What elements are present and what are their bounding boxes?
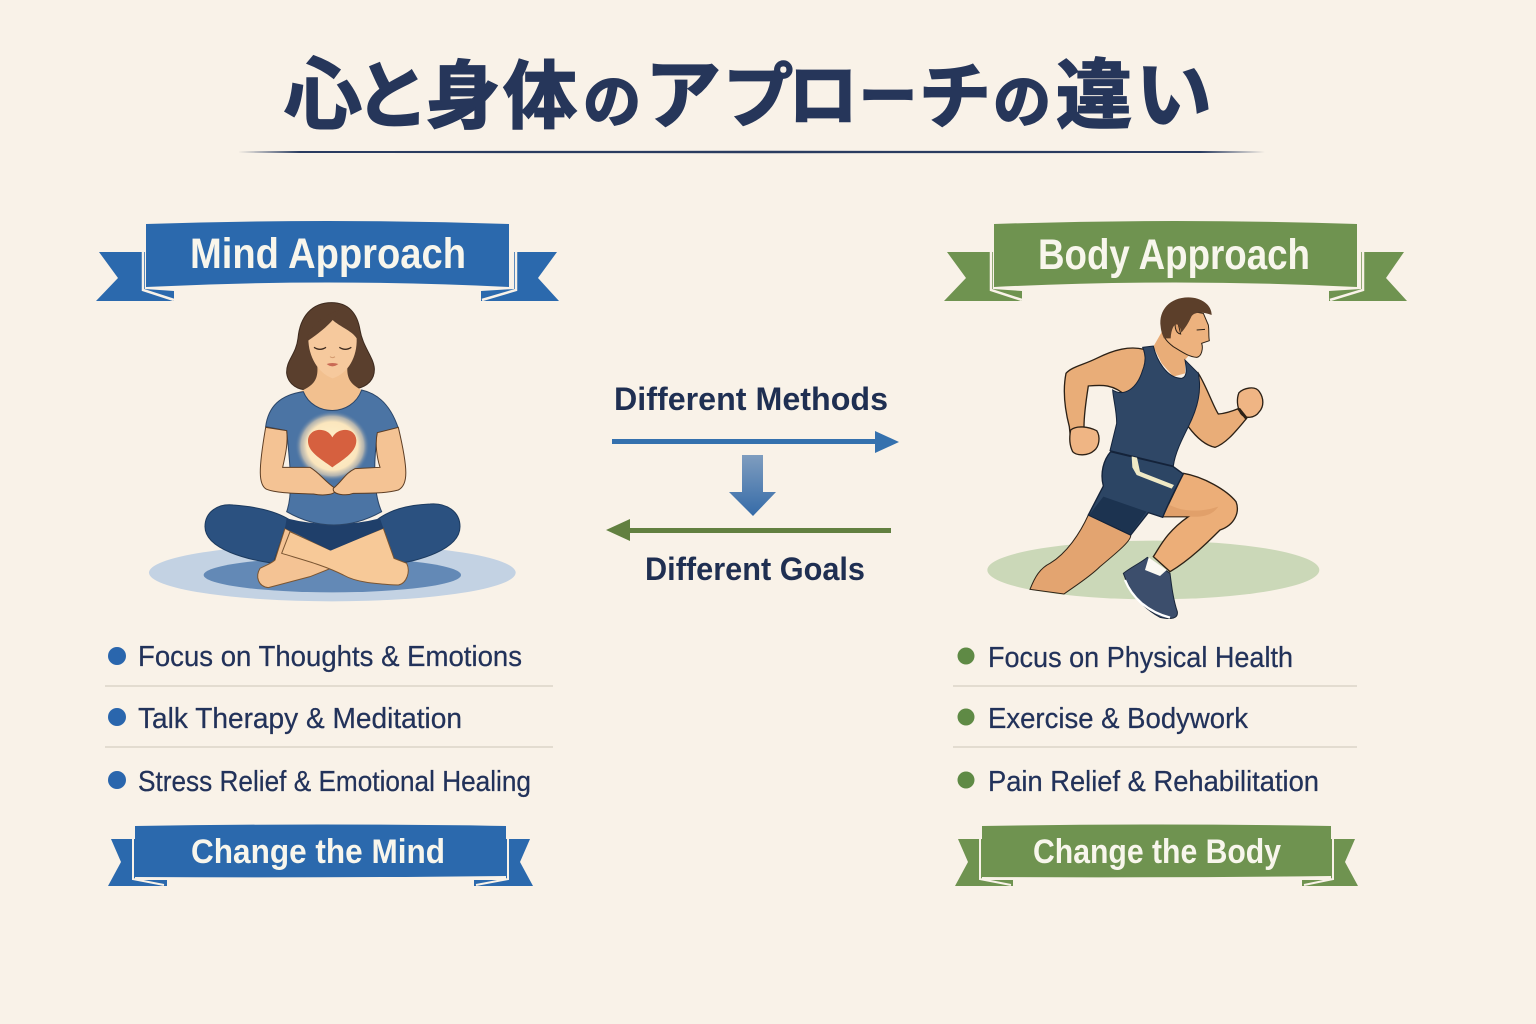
label: Different Methods: Different Methods (614, 381, 888, 417)
bullet list: mind (105, 641, 553, 798)
wrist band (1239, 409, 1247, 419)
shorts (1088, 452, 1183, 535)
title: ロ (788, 40, 858, 141)
rear fist (1070, 427, 1099, 455)
head (1163, 312, 1209, 357)
sock (1145, 557, 1167, 576)
title: 体 (503, 37, 577, 144)
arrow: right blue (612, 431, 899, 453)
hair (287, 303, 374, 390)
hair front (307, 309, 340, 342)
rear arm (1064, 348, 1147, 440)
front fist (1237, 388, 1263, 417)
shorts stripe (1132, 456, 1174, 489)
shirt (266, 390, 398, 525)
bullet list: mind: Focus on Thoughts & Emotions (138, 641, 522, 673)
ear and eye (1175, 320, 1205, 334)
illustration: meditating woman (149, 303, 516, 601)
glow (295, 411, 370, 481)
title: 心 (284, 33, 362, 145)
ribbon: Change the Body: Change the Body (1033, 833, 1281, 871)
legs (205, 505, 290, 563)
title: の (583, 55, 641, 139)
neck (1153, 323, 1193, 377)
bullet list: body: Pain Relief & Rehabilitation (988, 766, 1319, 798)
front leg (1153, 473, 1237, 572)
bullet list: body: Exercise & Bodywork (988, 703, 1248, 735)
illustration: running man (987, 297, 1319, 619)
heart (308, 430, 356, 467)
ribbon: Change the Body (955, 824, 1358, 886)
label: Different Goals: Different Goals (645, 551, 865, 587)
arrow: down (729, 455, 776, 516)
title underline (238, 151, 1265, 153)
bullet list: body: Focus on Physical Health (988, 642, 1293, 674)
bullet list: mind: Stress Relief & Emotional Healing (138, 766, 531, 798)
bullet list: mind: Talk Therapy & Meditation (138, 703, 462, 735)
arms (260, 427, 335, 495)
ribbon: Mind Approach: Mind Approach (190, 230, 466, 278)
panel: center comparison (606, 381, 899, 587)
title: と (355, 37, 429, 144)
title: 身 (426, 37, 500, 144)
crotch shadow (285, 518, 383, 551)
face (308, 317, 357, 378)
title: の (993, 55, 1051, 139)
title: い (1136, 34, 1212, 144)
ribbon: Body Approach (944, 221, 1407, 301)
crossed feet (258, 528, 343, 588)
arrow: left green (606, 519, 891, 541)
panel: mind approach (96, 221, 559, 886)
shorts shadow (1089, 497, 1147, 534)
ribbon: Change the Mind: Change the Mind (191, 833, 445, 871)
title: ー (859, 50, 917, 134)
neck and chest (297, 367, 368, 410)
shoe (1123, 557, 1177, 619)
title: ア (645, 34, 721, 144)
title: 違 (1056, 34, 1132, 144)
tank top (1110, 346, 1200, 466)
hair (1160, 297, 1212, 338)
title (284, 33, 1212, 145)
mat (987, 541, 1319, 599)
mat (149, 544, 516, 601)
title: チ (919, 38, 991, 143)
ribbon: Mind Approach (96, 221, 559, 301)
panel: body approach (944, 221, 1407, 886)
title: プ (723, 41, 793, 142)
bullet list: body (953, 642, 1357, 798)
ribbon: Body Approach: Body Approach (1038, 231, 1310, 279)
rear leg (1030, 515, 1131, 594)
ribbon: Change the Mind (108, 824, 533, 886)
forward arm (1188, 373, 1247, 447)
